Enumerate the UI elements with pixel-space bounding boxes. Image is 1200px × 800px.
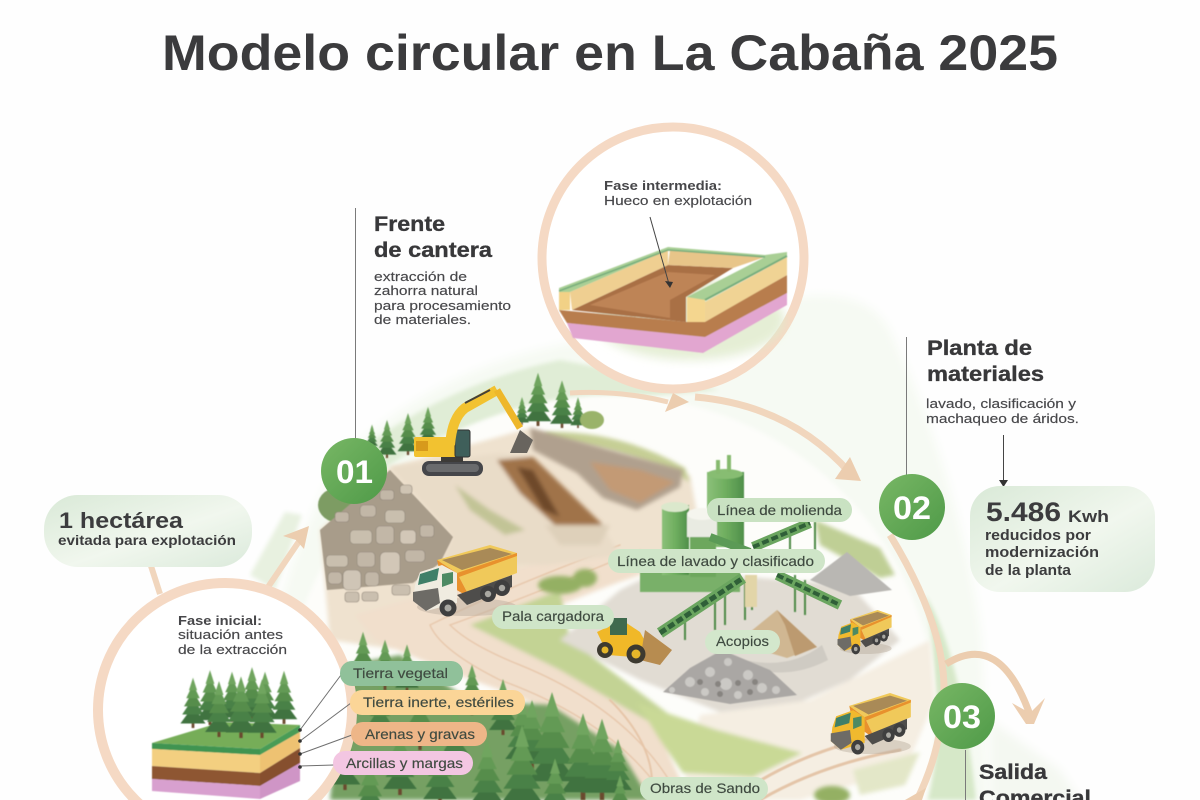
quarry and plant landscape xyxy=(318,373,935,800)
bushes xyxy=(538,569,850,800)
rock pile xyxy=(320,470,453,602)
text block: salida comercial: Salida xyxy=(979,761,1047,784)
step 03 leader line xyxy=(964,750,966,800)
step 02 leader line xyxy=(906,337,908,476)
circular arrows xyxy=(151,392,1045,800)
callout: 5.486 Kwh xyxy=(970,486,1155,592)
badge 02: 02 xyxy=(893,490,931,526)
connector: hectare pill xyxy=(151,566,160,594)
text block: planta de materiales: lavado, clasificación y xyxy=(926,396,1077,411)
dump truck: plant xyxy=(838,610,892,654)
excavated pit block xyxy=(559,247,787,360)
badge 01 xyxy=(321,438,387,504)
quarry hill xyxy=(390,428,683,565)
text block: planta de materiales: Planta de xyxy=(927,337,1032,360)
label: obras de sando xyxy=(640,777,768,800)
badge 03 xyxy=(929,683,995,749)
road tracks xyxy=(430,545,900,800)
dump truck: white cab xyxy=(413,545,517,616)
stockpiles xyxy=(663,552,892,704)
callout: 1 hectárea: evitada para explotación xyxy=(58,533,236,548)
label: línea de molienda: Línea de molienda xyxy=(717,502,842,518)
text block: frente de cantera: Frente xyxy=(374,213,445,236)
label: arcillas y margas: Arcillas y margas xyxy=(346,755,463,771)
arrow: start to quarry xyxy=(266,537,302,590)
label: línea de lavado: Línea de lavado y clasificado xyxy=(617,553,814,569)
excavator xyxy=(414,390,533,476)
text block: frente de cantera: zahorra natural xyxy=(374,283,478,298)
callout: 5.486 Kwh: reducidos por xyxy=(985,528,1091,544)
text block: planta de materiales: materiales xyxy=(927,363,1044,386)
text block: planta de materiales xyxy=(926,337,1079,426)
tree stand on soil block xyxy=(180,667,297,738)
label: tierra vegetal: Tierra vegetal xyxy=(353,665,448,681)
arc: plant to exit xyxy=(890,535,944,800)
text block: frente de cantera: de materiales. xyxy=(374,312,471,327)
plant: silos xyxy=(640,455,815,640)
text block: planta de materiales: machaqueo de áridos. xyxy=(926,411,1079,426)
callout: 5.486 Kwh: modernización xyxy=(985,545,1099,561)
label: acopios: Acopios xyxy=(716,633,769,649)
wheel loader xyxy=(597,618,672,665)
title: Modelo circular en La Cabaña 2025 xyxy=(162,25,1058,81)
arrow: sales branch xyxy=(946,654,1030,715)
text block: frente de cantera xyxy=(374,213,511,327)
heading: fase intermedia: Fase intermedia: xyxy=(604,178,722,193)
heading: fase intermedia xyxy=(604,178,752,208)
label: tierra inerte: Tierra inerte, estériles xyxy=(363,694,514,710)
label: acopios xyxy=(705,630,780,654)
badge 02 xyxy=(879,474,945,540)
heading: fase inicial: Fase inicial: xyxy=(178,613,262,628)
text block: frente de cantera: de cantera xyxy=(374,239,492,262)
text block: frente de cantera: para procesamiento xyxy=(374,298,511,313)
dump truck: exit road xyxy=(831,693,911,754)
text block: frente de cantera: extracción de xyxy=(374,269,467,284)
label: tierra vegetal xyxy=(340,661,463,686)
label: pala cargadora: Pala cargadora xyxy=(502,608,604,624)
label: arcillas y margas xyxy=(333,751,473,775)
arc: pit to plant xyxy=(695,397,850,473)
label: arenas y gravas: Arenas y gravas xyxy=(365,726,475,742)
heading: fase inicial xyxy=(178,613,287,657)
step 01 leader line xyxy=(354,208,356,440)
callout: 5.486 Kwh: de la planta xyxy=(985,563,1072,579)
badge 01: 01 xyxy=(336,454,373,490)
background wash: circular green field xyxy=(250,295,1080,800)
heading: fase intermedia: Hueco en explotación xyxy=(604,193,752,208)
arrow: kWh pointer xyxy=(999,435,1008,487)
arrowheads xyxy=(283,393,1045,800)
label: arenas y gravas xyxy=(351,722,487,746)
ridge trees xyxy=(318,373,604,523)
panel: fase intermedia circle xyxy=(542,127,804,389)
label: línea de molienda xyxy=(707,498,852,522)
callout: 5.486 Kwh: 5.486 xyxy=(986,497,1061,527)
soil block xyxy=(152,722,300,799)
heading: fase inicial: situación antes xyxy=(178,627,284,642)
panel: fase inicial circle xyxy=(98,583,352,800)
forest xyxy=(330,632,650,800)
label: obras de sando: Obras de Sando xyxy=(650,780,760,796)
leader lines to soil layers xyxy=(300,675,352,766)
text block: salida comercial xyxy=(979,761,1091,800)
callout: 1 hectárea xyxy=(44,495,252,567)
callout: 5.486 Kwh: Kwh xyxy=(1068,507,1109,526)
conveyors xyxy=(660,523,840,633)
label: pala cargadora xyxy=(492,605,614,629)
callout: 1 hectárea: 1 hectárea xyxy=(59,508,184,533)
label: tierra inerte xyxy=(350,690,525,715)
label: línea de lavado xyxy=(608,549,825,573)
arc: quarry to pit xyxy=(570,392,668,402)
badge 03: 03 xyxy=(943,699,981,735)
ground washes xyxy=(320,428,935,800)
arrow: pit pointer xyxy=(650,217,673,288)
heading: fase inicial: de la extracción xyxy=(178,642,287,657)
